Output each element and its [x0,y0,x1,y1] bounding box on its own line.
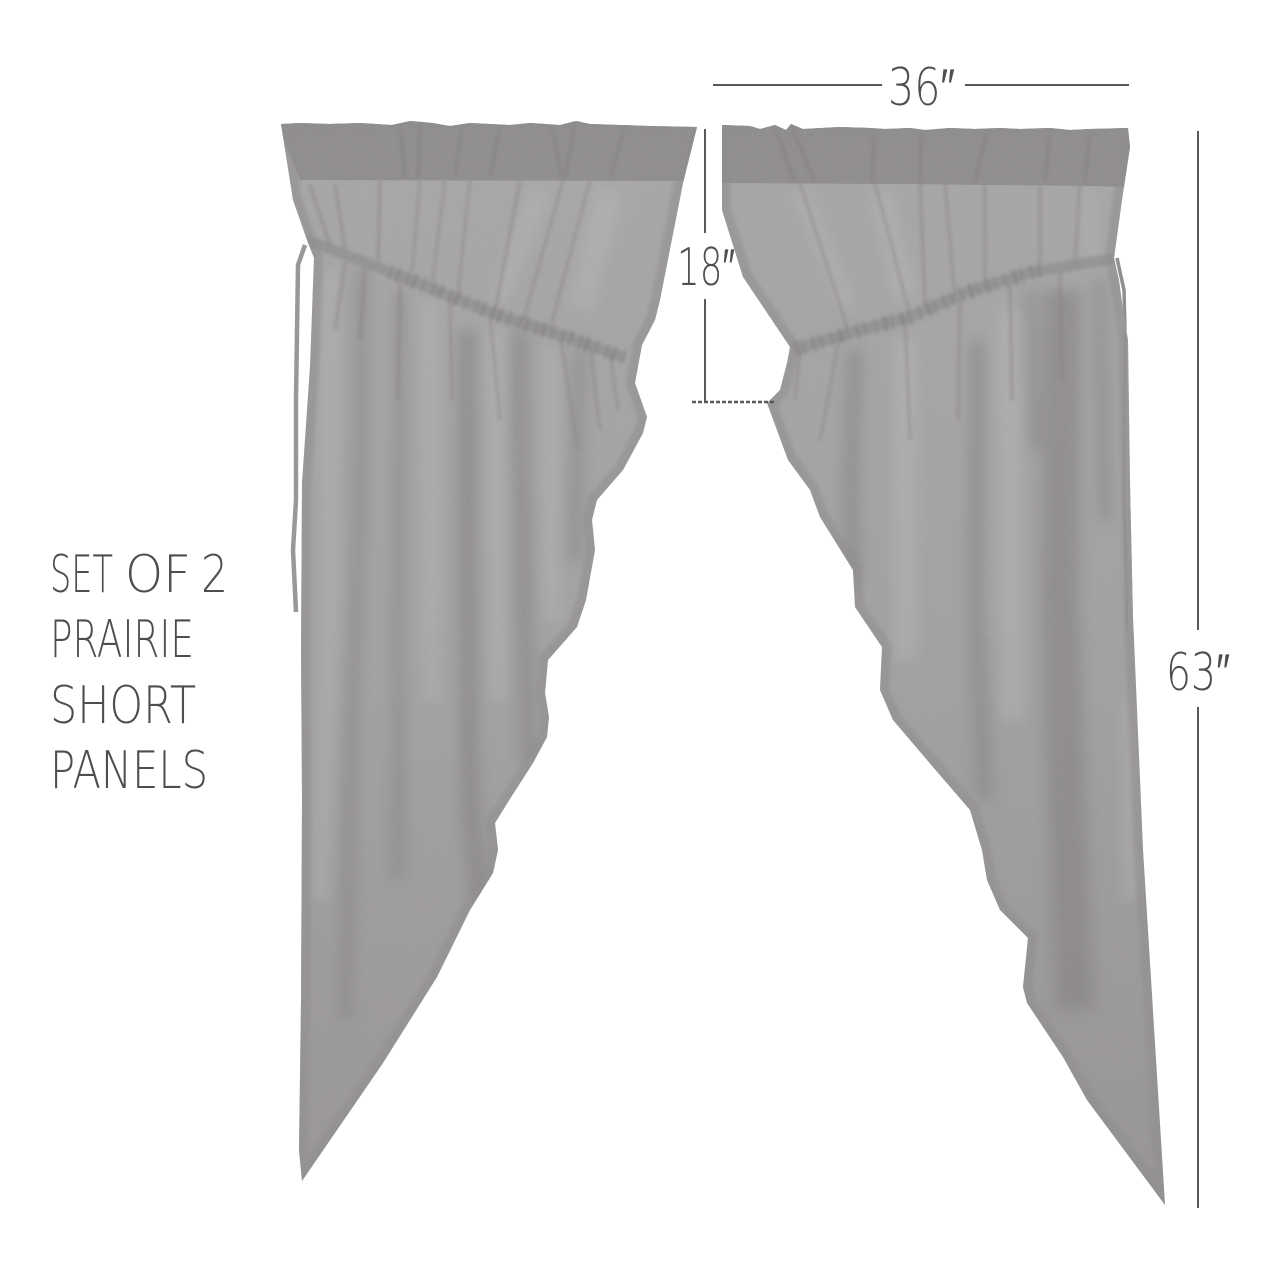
text block: product description: PRAIRIE [50,610,194,670]
text block: product description: OF [125,545,191,605]
dimension: 63 inch length: 63″ [1166,643,1230,703]
right curtain rod pocket band [722,124,1130,186]
text block: product description: 2 [201,545,228,605]
left curtain fabric texture [270,110,710,1190]
left curtain hem [281,121,697,1181]
text block: product description [50,545,228,801]
dimension: 36 inch width: 36″ [888,58,955,118]
right curtain tie string [1117,258,1125,330]
right curtain gathered ruffle [793,258,1117,350]
left curtain fabric [270,110,710,1190]
left curtain gathered ruffle [307,240,625,358]
right curtain fabric texture [710,115,1170,1210]
text block: product description: PANELS [50,741,208,801]
panel: left curtain [270,110,710,1190]
dimension: 18 inch drop: 18″ [677,238,735,298]
left curtain tie string [293,245,305,612]
text block: product description: SHORT [50,676,196,736]
right curtain fabric [710,115,1170,1210]
right curtain hem [722,124,1165,1205]
panel: right curtain [710,115,1170,1210]
right curtain inner tie line [1123,496,1126,624]
left curtain rod pocket band [275,118,705,181]
text block: product description: SET [50,545,113,605]
